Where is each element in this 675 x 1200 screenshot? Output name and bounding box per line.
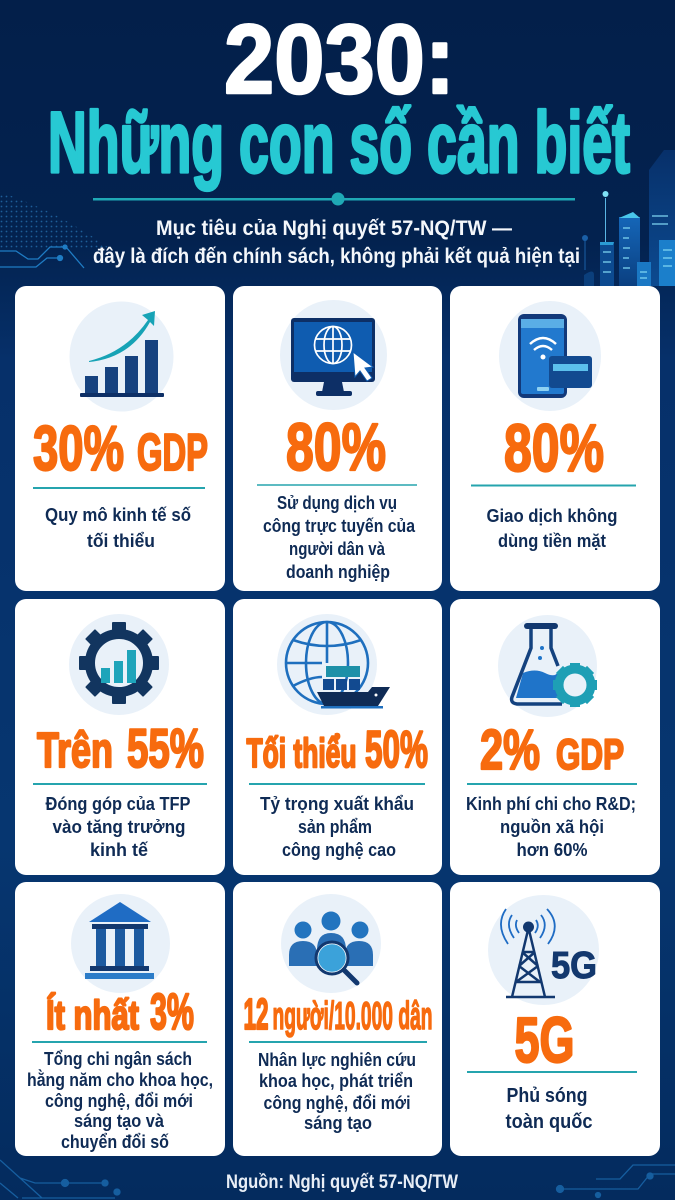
panel: 2% GDP (450, 599, 660, 875)
value: 55% (127, 717, 204, 779)
description: công trực tuyến của (263, 516, 416, 536)
description (27, 1049, 213, 1152)
intro text (93, 217, 580, 268)
value: Trên (37, 724, 113, 778)
panel: 12 người/10.000 dân (233, 882, 442, 1156)
description: Tổng chi ngân sách (44, 1049, 192, 1069)
description: sáng tạo và (74, 1111, 165, 1131)
description (46, 794, 190, 860)
icon: globe and cargo ship (277, 614, 390, 715)
value: 12 (244, 990, 268, 1039)
icon: government building (71, 894, 170, 993)
intro text: đây là đích đến chính sách, không phải kết quả hiện tại (93, 245, 580, 268)
value: 30% (33, 414, 124, 484)
decoration: dotted wave (0, 192, 112, 250)
description (260, 794, 414, 860)
description: Nhân lực nghiên cứu (258, 1050, 416, 1070)
decoration: city skyline (582, 150, 675, 290)
decoration: circuit lines bottom (0, 1160, 675, 1198)
description: người dân và (289, 539, 386, 559)
icon: 5G tower (488, 895, 599, 1005)
value: 5G (514, 1004, 574, 1076)
description: hằng năm cho khoa học, (27, 1069, 213, 1090)
icon: phone and card (499, 301, 601, 411)
panel: 5G (450, 882, 660, 1156)
icon: bar chart with arrow (70, 302, 174, 412)
description (486, 506, 618, 551)
description: Giao dịch không (486, 506, 618, 526)
description: chuyển đổi số (61, 1132, 169, 1152)
source footer: Nguồn: Nghị quyết 57-NQ/TW (226, 1172, 458, 1193)
description: công nghệ cao (282, 840, 396, 860)
value: GDP (137, 424, 208, 482)
value: GDP (556, 731, 624, 779)
description: Đóng góp của TFP (46, 794, 190, 814)
description: tối thiểu (87, 531, 155, 551)
panel: 80% online services (233, 286, 442, 591)
description: sản phẩm (298, 817, 372, 837)
description: Phủ sóng (506, 1085, 588, 1107)
description: công nghệ, đổi mới (264, 1093, 410, 1113)
description: công nghệ, đổi mới (45, 1091, 193, 1111)
value (37, 717, 204, 779)
icon: flask and gear (498, 615, 597, 717)
panel: 80% cashless (450, 286, 660, 591)
value: Tối thiểu (246, 730, 356, 776)
description: toàn quốc (506, 1111, 592, 1133)
description: kinh tế (90, 840, 149, 860)
description (258, 1050, 416, 1133)
description (263, 493, 416, 582)
title divider (93, 192, 575, 206)
description (45, 505, 191, 551)
intro text: Mục tiêu của Nghị quyết 57-NQ/TW — (156, 217, 512, 240)
icon: gear with bars (69, 614, 169, 715)
description: nguồn xã hội (500, 817, 604, 837)
panel: 30% GDP (15, 286, 225, 591)
panel: Tối thiểu 50% (233, 599, 442, 875)
icon: monitor with globe (280, 300, 387, 410)
value: 80% (504, 411, 604, 486)
title: 2030: 2030: (224, 4, 455, 114)
description: hơn 60% (516, 840, 588, 860)
description: sáng tạo (304, 1113, 372, 1133)
icon: 5G tower: 5G (551, 945, 597, 987)
description: Quy mô kinh tế số (45, 505, 191, 525)
description: khoa học, phát triển (259, 1071, 413, 1091)
decoration: circuit lines top left (0, 245, 84, 268)
description: doanh nghiệp (286, 562, 390, 582)
panel: Ít nhất 3% (15, 882, 225, 1156)
description: Sử dụng dịch vụ (277, 493, 397, 513)
description: Tỷ trọng xuất khẩu (260, 794, 414, 814)
description: vào tăng trưởng (52, 817, 186, 837)
description: Kinh phí chi cho R&D; (466, 794, 636, 814)
value: 3% (150, 983, 194, 1040)
description: dùng tiền mặt (498, 531, 606, 551)
icon: people with magnifier (281, 894, 381, 993)
description (506, 1085, 592, 1133)
description (466, 794, 636, 860)
value: 80% (286, 410, 386, 485)
value (46, 983, 194, 1040)
value: 2% (480, 718, 540, 782)
value (244, 990, 432, 1039)
panel: 12 người/10.000 dân: người/10.000 dân (272, 995, 432, 1038)
panel: Trên 55% (15, 599, 225, 875)
value (480, 718, 624, 782)
value: Ít nhất (46, 992, 139, 1038)
value: 50% (365, 721, 428, 779)
